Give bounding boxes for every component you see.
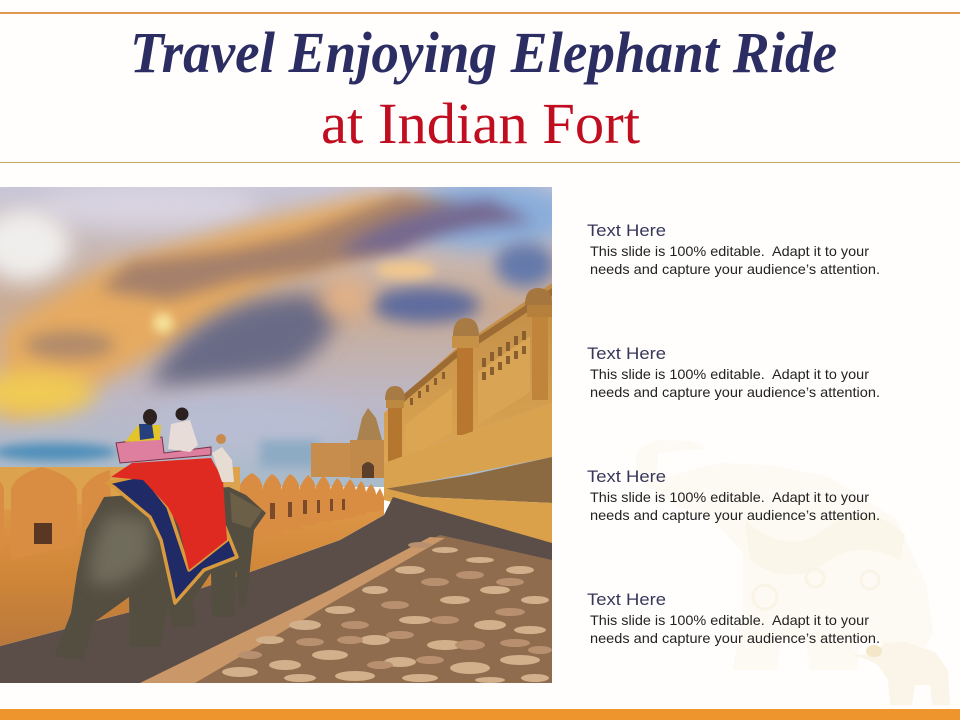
howdah seat [116, 437, 211, 463]
text block 2: Text Here [587, 344, 666, 363]
watermark: large elephant [635, 440, 933, 670]
text block 3: Text Here [587, 467, 666, 486]
navy and gold blanket [107, 475, 237, 603]
text block 4 [587, 590, 880, 646]
text block 2 [587, 344, 880, 400]
rider: man [168, 408, 198, 452]
text block 4: needs and capture your audience’s attention. [590, 630, 880, 646]
text block 2: needs and capture your audience’s attention. [590, 384, 880, 400]
text block 2: This slide is 100% editable. Adapt it to your [590, 366, 869, 382]
text block 1: needs and capture your audience’s attention. [590, 261, 880, 277]
mahout [212, 434, 234, 482]
title rule [0, 162, 960, 163]
bottom bar [0, 709, 960, 720]
text block 3 [587, 467, 880, 523]
battlement wall [0, 467, 384, 646]
rider: woman [125, 409, 161, 442]
text block 3: This slide is 100% editable. Adapt it to your [590, 489, 869, 505]
text block 1: Text Here [587, 221, 666, 240]
red blanket [111, 458, 227, 570]
road [0, 497, 552, 683]
fort [311, 283, 552, 545]
text block 4: This slide is 100% editable. Adapt it to your [590, 612, 869, 628]
watermark: small elephant [852, 642, 950, 705]
text block 4: Text Here [587, 590, 666, 609]
title [130, 20, 837, 156]
sky and clouds [0, 180, 575, 487]
cobbled path [140, 535, 552, 683]
photo: elephant ride at fort [0, 180, 575, 683]
title: at Indian Fort [321, 91, 640, 156]
title: Travel Enjoying Elephant Ride [130, 20, 837, 85]
top rule [0, 12, 960, 14]
elephant body [64, 487, 266, 630]
elephant with riders [64, 408, 266, 630]
fort towers [385, 288, 552, 463]
text block 1: This slide is 100% editable. Adapt it to your [590, 243, 869, 259]
text block 3: needs and capture your audience’s attention. [590, 507, 880, 523]
text block 1 [587, 221, 880, 277]
